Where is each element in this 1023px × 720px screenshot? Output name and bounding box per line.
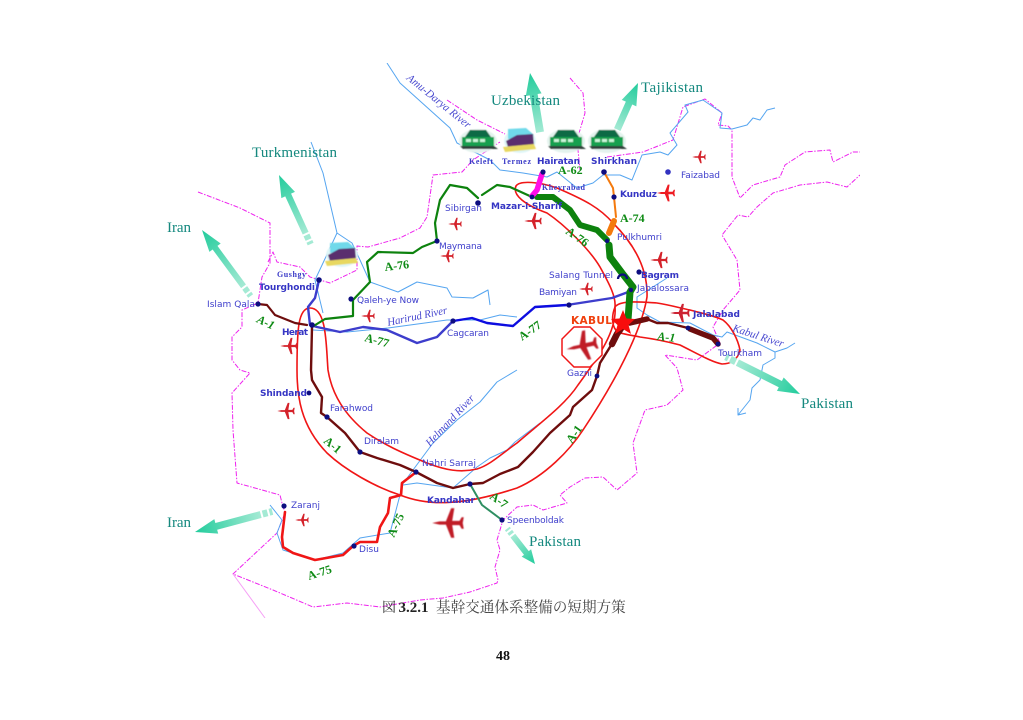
label: Hairatan: Hairatan [537, 157, 580, 167]
plane: Shindand [277, 403, 295, 419]
road A-75 [282, 473, 415, 560]
label: Salang Tunnel: Salang Tunnel [549, 271, 613, 281]
map artwork [167, 63, 860, 618]
label: Tajikistan: Tajikistan [641, 80, 704, 96]
label: Qaleh-ye Now: Qaleh-ye Now [357, 296, 419, 306]
plane: Kandahar [432, 508, 464, 538]
figure caption: 基幹交通体系整備の短期方策 [436, 596, 626, 617]
city labels [207, 157, 762, 555]
road A-77 [308, 280, 631, 343]
label: Pulkhumri: Pulkhumri [617, 233, 662, 243]
label: Jalalabad: Jalalabad [692, 310, 740, 320]
label: A-74: A-74 [620, 211, 645, 225]
arrow to Pakistan south [503, 525, 540, 568]
arrow to Iran north [196, 226, 256, 300]
label: Maymana: Maymana [439, 242, 482, 252]
label: Nahri Sarraj: Nahri Sarraj [422, 459, 476, 469]
label: Shirkhan: Shirkhan [591, 157, 637, 167]
road A-7 [470, 484, 502, 520]
label: A-7: A-7 [487, 489, 511, 511]
city dots [255, 169, 720, 549]
label: Helmand River: Helmand River [423, 392, 478, 450]
arrow to Turkmenistan [272, 172, 317, 247]
label: A-75 vertical: A-75 [384, 511, 407, 539]
label: A-75 south: A-75 [306, 562, 333, 583]
rail border crossings [325, 128, 627, 267]
plane: Jalalabad [670, 304, 690, 322]
label: Gushgy: Gushgy [277, 270, 306, 279]
label: A-1 Kabul to Kandahar: A-1 [563, 422, 585, 446]
train icon: Hairatan [547, 129, 586, 153]
label: A-76 north: A-76 [384, 257, 410, 274]
label: Jabalossara: Jabalossara [636, 284, 689, 294]
figure caption: 図 [382, 597, 396, 617]
label: A-1 Islam Qala: A-1 [254, 312, 277, 332]
Salang tunnel arc [618, 274, 627, 279]
label: Iran south: Iran [167, 515, 192, 531]
figure caption: 3.2.1 [398, 600, 428, 616]
label: Disu: Disu [359, 545, 379, 555]
plane: Maymana [440, 250, 454, 262]
train icon: Shirkhan [588, 129, 627, 153]
plane: Herat [280, 338, 298, 354]
train icon: Termez [503, 128, 536, 153]
plane: Mazar-i-Sharif [524, 213, 542, 229]
label: Tourghondi: Tourghondi [259, 283, 315, 293]
label: Zaranj: Zaranj [291, 501, 320, 511]
label: A-77 east: A-77 [516, 318, 544, 343]
label: Shindand: Shindand [260, 389, 307, 399]
plane: Kunduz [657, 185, 675, 201]
label: Kheyrabad: Kheyrabad [542, 183, 586, 192]
label: Termez: Termez [502, 157, 531, 166]
label: A-77 west: A-77 [363, 330, 391, 350]
red priority corridor loops [297, 182, 740, 503]
export arrows [193, 72, 803, 568]
road A-74 [604, 172, 616, 233]
label: Amu-Darya River: Amu-Darya River [403, 71, 474, 132]
label: Pakistan south: Pakistan [529, 534, 582, 550]
arrow to Pakistan east [722, 350, 803, 401]
label: Speenboldak: Speenboldak [507, 516, 565, 526]
arrow to Iran south [193, 504, 274, 539]
label: A-76 Mazar: A-76 [563, 224, 592, 250]
road A-62 [532, 174, 542, 196]
label: A-62: A-62 [558, 163, 583, 177]
label: Cagcaran: Cagcaran [447, 329, 489, 339]
label: Farahwod: Farahwod [330, 404, 373, 414]
Kabul capital star [611, 310, 635, 334]
plane: Bamiyan [579, 283, 593, 295]
label: Kandahar: Kandahar [427, 496, 476, 506]
label: Harirud River: Harirud River [385, 304, 449, 329]
plane: Faizabad [692, 151, 706, 163]
page number: 48 [496, 649, 510, 664]
label: Iran north: Iran [167, 220, 192, 236]
label: Mazar-i-Sharif: Mazar-i-Sharif [491, 202, 562, 212]
plane: Bagram [650, 252, 668, 268]
Kabul airport octagon [562, 327, 602, 367]
label: Islam Qala: Islam Qala [207, 300, 255, 310]
label: Diralam: Diralam [364, 437, 399, 447]
label: A-1 Herat to Kandahar: A-1 [321, 434, 344, 456]
label: Turkmenistan: Turkmenistan [252, 145, 338, 161]
country labels [167, 80, 854, 550]
label: Kunduz: Kunduz [620, 190, 657, 200]
train icon: Keleft [459, 129, 498, 153]
river labels [385, 71, 786, 450]
plane: Zaranj [295, 514, 309, 526]
label: Gazni: Gazni [567, 369, 592, 379]
arrow to Tajikistan [606, 80, 645, 142]
label: Keleft: Keleft [469, 157, 493, 166]
label: Faizabad: Faizabad [681, 171, 720, 181]
country borders [198, 78, 860, 618]
road A-76 [312, 185, 633, 327]
plane: Qaleh-ye Now [361, 310, 375, 322]
label: Tourkham: Tourkham [717, 349, 762, 359]
arrow to Uzbekistan [522, 72, 548, 133]
road labels [254, 163, 676, 583]
label: Pakistan east: Pakistan [801, 396, 854, 412]
label: KABUL: KABUL [571, 315, 612, 327]
plane: Sibirgan [448, 218, 462, 230]
label: Sibirgan: Sibirgan [445, 204, 482, 214]
rivers [270, 63, 795, 560]
train icon: Gushgy [325, 242, 358, 267]
label: Uzbekistan: Uzbekistan [491, 93, 560, 109]
label: Herat: Herat [282, 328, 309, 338]
label: Bamiyan: Bamiyan [539, 288, 577, 298]
airports [277, 151, 706, 538]
road A-1 [258, 304, 718, 488]
label: Kabul River: Kabul River [730, 322, 786, 350]
label: A-1 Jalalabad: A-1 [656, 329, 676, 345]
label: Bagram: Bagram [641, 271, 679, 281]
